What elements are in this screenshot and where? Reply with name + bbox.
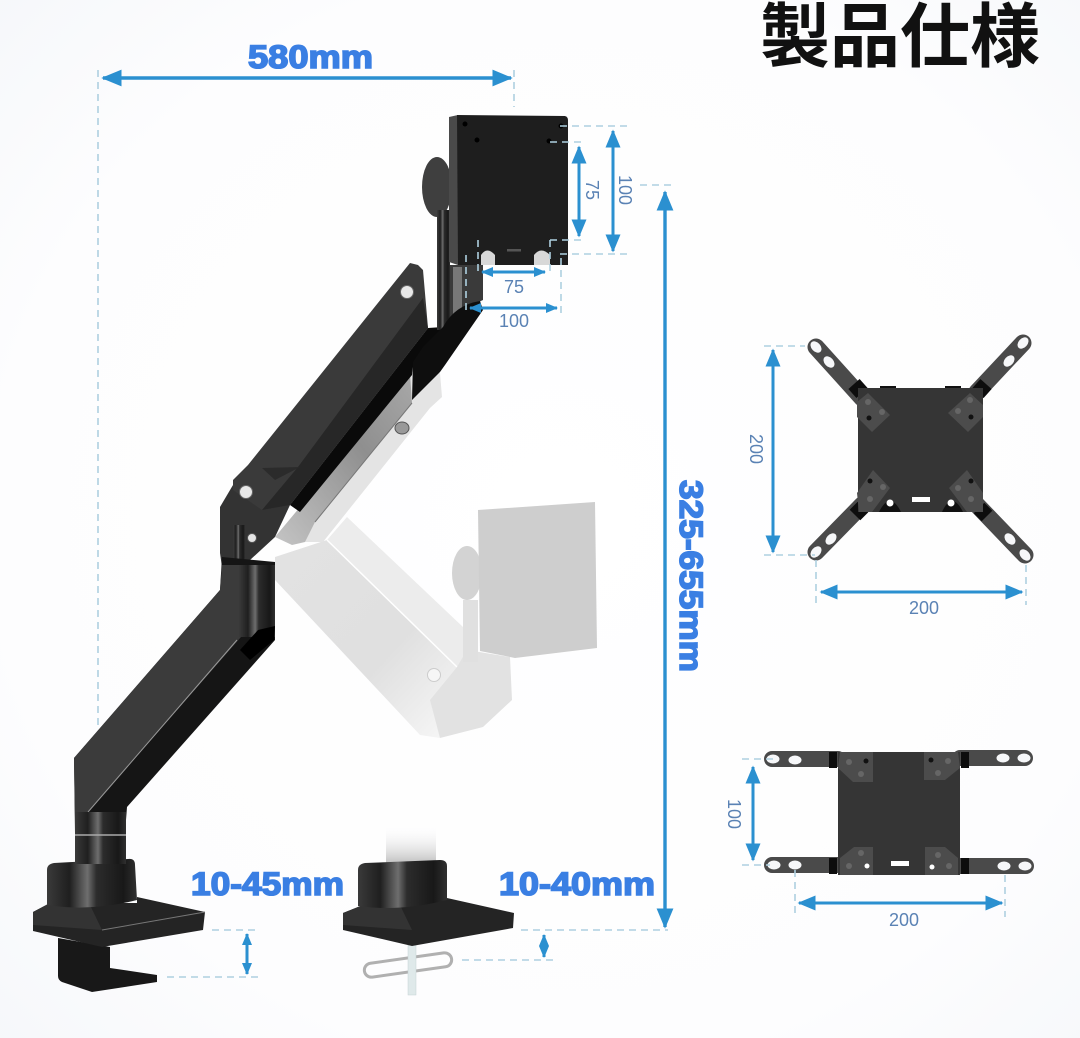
dimension: VESA 75 and 100: 75 — [504, 277, 524, 297]
dimension: 200 x 200: 200 — [909, 598, 939, 618]
upper arm plate — [233, 263, 428, 510]
dimension: 200 x 100 — [724, 759, 1005, 930]
dimension: 200 x 200 — [746, 346, 1026, 618]
dimension: 200 x 200: 200 — [746, 434, 766, 464]
dimension: grommet thickness 10-40mm: 10-40mm — [499, 866, 655, 902]
dimension: height 325-655mm — [521, 185, 709, 930]
dimension: 200 x 100: 200 — [889, 910, 919, 930]
dimension: 200 x 100: 100 — [724, 799, 744, 829]
dimension: VESA 75 and 100 — [466, 126, 635, 331]
dimension: VESA 75 and 100: 75 — [582, 180, 602, 200]
monitor VESA mount — [412, 115, 568, 400]
dimension: width 580mm — [98, 39, 514, 725]
adapter plate: 200 x 100 — [766, 752, 1032, 875]
upper arm dark underside — [290, 327, 443, 512]
base column — [75, 812, 126, 864]
clamp base: grommet mount — [343, 825, 514, 995]
transparent lower gas-spring cover — [275, 373, 442, 545]
clamp base: C-clamp — [33, 850, 205, 992]
dimension: clamp thickness 10-45mm: 10-45mm — [191, 866, 344, 902]
dimension: height 325-655mm: 325-655mm — [673, 480, 709, 672]
elbow joint — [220, 485, 290, 567]
dimension: VESA 75 and 100: 100 — [615, 175, 635, 205]
lower arm — [74, 557, 275, 833]
ghost: lowered monitor arm position — [275, 502, 597, 738]
dimension: width 580mm: 580mm — [248, 39, 373, 75]
title: 製品仕様 — [760, 0, 1040, 76]
dimension: clamp thickness 10-45mm — [167, 866, 344, 977]
monitor arm — [74, 263, 443, 864]
dimension: VESA 75 and 100: 100 — [499, 311, 529, 331]
adapter plate: 200 x 200 — [808, 335, 1033, 563]
